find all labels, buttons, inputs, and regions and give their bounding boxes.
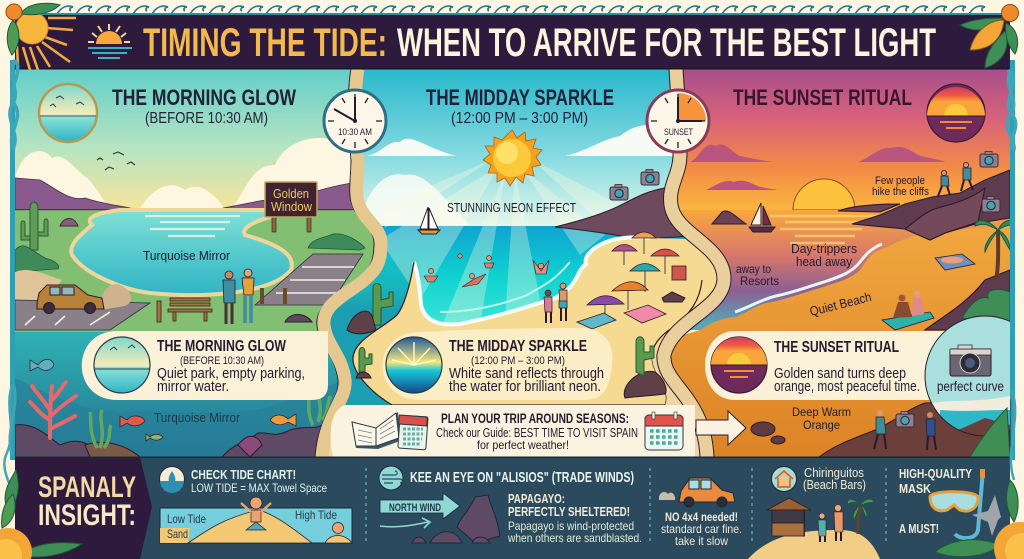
plan text line 2: for perfect weather!: [477, 438, 569, 452]
text: stunning neon effect: STUNNING NEON EFFECT: [447, 200, 576, 215]
cliffs: [838, 170, 1010, 330]
mask section: HIGH-QUALITY: [899, 466, 972, 481]
title gold: TIMING THE TIDE:: [143, 21, 387, 65]
clock: sunset: SUNSET: [664, 127, 693, 137]
text: resorts: Resorts: [740, 274, 779, 288]
heading: midday sparkle: (12:00 PM – 3:00 PM): [451, 110, 588, 127]
heading: morning glow: (BEFORE 10:30 AM): [145, 110, 268, 127]
stream rocks: [347, 311, 376, 378]
midday callout heading: THE MIDDAY SPARKLE: [449, 338, 587, 355]
cacti: [359, 284, 654, 376]
icon: orange car: [679, 478, 735, 507]
parked car: [37, 285, 104, 314]
tide chart section: [160, 466, 352, 543]
icon: snorkel mask: [930, 469, 1001, 538]
tropical leaves right: [970, 408, 1010, 457]
people at bar: [818, 504, 843, 542]
parking lot upper: [255, 254, 363, 305]
sunset callout body line 2: orange, most peaceful time.: [774, 378, 920, 395]
sailboat sunset: [749, 203, 775, 232]
rocks bottom right: [222, 425, 322, 457]
mask section: MASK: [899, 481, 932, 496]
callout: morning glow: [82, 331, 328, 400]
clock: 10:30 AM: 10:30 AM: [338, 127, 372, 137]
mask section: A MUST!: [899, 521, 939, 536]
lower cliff: [819, 400, 1010, 457]
beach umbrellas: [587, 232, 679, 322]
rope top left: [10, 60, 18, 150]
tide diagram: High Tide: [295, 508, 337, 522]
heading: sunset ritual: THE SUNSET RITUAL: [733, 85, 912, 110]
icon: large calendar: [645, 412, 683, 450]
morning callout time: (BEFORE 10:30 AM): [180, 355, 264, 367]
car section: [659, 478, 742, 548]
sand path divider right: [664, 69, 724, 457]
corner: bottom left flower: [0, 470, 82, 559]
papagayo text: PAPAGAYO:: [508, 491, 565, 506]
title banner: [15, 15, 1010, 70]
golden window sign: Golden: [273, 186, 309, 201]
text: hike the cliffs: hike the cliffs: [872, 186, 929, 198]
plan text line 1: Check our Guide: BEST TIME TO VISIT SPAIN: [436, 426, 638, 440]
icon: title sunrise: [88, 24, 132, 58]
divider 2: [649, 468, 651, 543]
label: turquoise mirror upper: Turquoise Mirror: [143, 248, 231, 263]
chiringuitos section: Chiringuitos: [804, 465, 864, 480]
corner: top right leaves: [960, 4, 1018, 68]
dust and sand left: [15, 270, 62, 305]
foliage lower right of beach: [962, 290, 1010, 325]
rope lower right: [1011, 390, 1015, 480]
sailboat midday: [418, 207, 440, 234]
rock: [412, 495, 500, 543]
sunset medallion: [711, 337, 767, 393]
palm: [848, 499, 874, 534]
sunset callout heading: THE SUNSET RITUAL: [774, 339, 899, 356]
arrow: north wind: [380, 493, 460, 519]
papagayo text: PERFECTLY SHELTERED!: [508, 504, 630, 519]
midday callout body line 2: the water for brilliant neon.: [449, 378, 601, 395]
small rock: [60, 218, 78, 226]
coral: [30, 382, 76, 438]
insight title block: SPANALY: [38, 471, 136, 504]
star shape: [972, 495, 1001, 536]
arrow: small wind: [380, 518, 430, 528]
callout: sunset ritual: [705, 331, 960, 400]
parking lot lower: [15, 300, 150, 330]
sand hill: [748, 530, 880, 559]
sunset sea: [660, 210, 1010, 330]
rocks bottom left: [15, 425, 140, 457]
camera icon: [950, 345, 991, 376]
text: head away: head away: [796, 254, 852, 269]
trade winds section: [379, 466, 642, 545]
papagayo text: Papagayo is wind-protected: [508, 519, 634, 533]
mask section: [899, 466, 1001, 538]
midday callout body line 1: White sand reflects through: [449, 365, 604, 382]
corner: bottom right flower: [935, 480, 1024, 559]
panel: the sunset ritual scene: [650, 69, 1018, 457]
seaweed: [90, 385, 331, 448]
palm tree: [974, 220, 1010, 280]
underwater section: [15, 332, 350, 457]
arrow: north wind: NORTH WIND: [389, 502, 441, 514]
golden window sign: Window: [271, 199, 313, 214]
tide diagram: Low Tide: [167, 512, 206, 526]
panel: the midday sparkle scene: [320, 69, 730, 460]
text: away to: away to: [736, 262, 771, 276]
cameras midday: [610, 170, 659, 200]
rope top right: [1007, 70, 1016, 150]
text: quiet beach: Quiet Beach: [808, 289, 873, 319]
heading: morning glow: [112, 85, 296, 127]
sad face: [332, 522, 344, 534]
panel: spanaly insight strip: [15, 456, 1010, 559]
trade winds heading: KEE AN EYE ON "ALISIOS" (TRADE WINDS): [410, 469, 634, 486]
fish: [30, 359, 296, 441]
beach people: [544, 283, 567, 323]
clouds midday: [360, 125, 680, 225]
insight title block: INSIGHT:: [38, 499, 136, 532]
midday beach sand: [354, 238, 716, 404]
tide diagram: [160, 497, 352, 543]
swimmers: [424, 254, 549, 287]
morning mountains: [15, 178, 138, 210]
callout: plan your trip: [331, 405, 695, 457]
couple: [223, 269, 254, 324]
heading: morning glow: THE MORNING GLOW: [112, 85, 296, 110]
bushes: [15, 234, 365, 272]
plan heading: PLAN YOUR TRIP AROUND SEASONS:: [441, 411, 629, 426]
parking posts and rock: [260, 288, 312, 322]
midday headland: [554, 188, 684, 238]
text: deep warm: Deep Warm: [792, 405, 851, 419]
car section: NO 4x4 needed!: [665, 510, 738, 524]
orange sand: [650, 225, 1010, 457]
midday medallion: [386, 337, 442, 393]
sunset callout body line 1: Golden sand turns deep: [774, 365, 906, 382]
plan background sand: [320, 405, 715, 457]
tide subheading: LOW TIDE = MAX Towel Space: [191, 481, 327, 495]
morning callout body line 1: Quiet park, empty parking,: [157, 365, 305, 382]
dark rocks on beach: [624, 292, 685, 398]
morning callout heading: THE MORNING GLOW: [157, 338, 287, 355]
divider 1: [365, 468, 367, 543]
callout: midday sparkle: [382, 328, 613, 400]
icon: tide drop: [160, 466, 184, 493]
cactus morning: [21, 202, 48, 250]
sun: [483, 130, 542, 186]
car section: standard car fine.: [661, 522, 742, 536]
hikers and camera on lower cliff: [874, 410, 936, 450]
corner: top left sun and fruit: [6, 3, 76, 70]
text: orange: Orange: [803, 418, 840, 432]
cameras on right cliffs: [980, 152, 1000, 212]
callout: perfect curve: [920, 310, 1024, 440]
heading: midday sparkle: THE MIDDAY SPARKLE: [426, 85, 614, 110]
turquoise lagoon: [71, 210, 292, 295]
tide heading: CHECK TIDE CHART!: [191, 467, 296, 482]
label: turquoise mirror lower: Turquoise Mirror: [154, 410, 241, 425]
heading: midday sparkle: [426, 85, 614, 127]
hikers on cliff: [938, 162, 973, 196]
small sea rock: [712, 211, 746, 224]
chiringuitos section: [748, 465, 880, 559]
icon: house: [772, 466, 796, 492]
morning land: [15, 210, 385, 335]
arrow: plan to sunset: [696, 411, 746, 445]
papagayo text: [507, 491, 642, 545]
chiringuitos section: (Beach Bars): [803, 477, 866, 492]
tide diagram: Sand: [167, 527, 188, 541]
beach bar hut: [767, 498, 811, 536]
car section: take it slow: [675, 534, 728, 548]
clock: sunset: [647, 90, 709, 152]
panel: the morning glow scene: [15, 69, 385, 457]
clock: 10:30 AM: [324, 90, 386, 152]
medallion: sunset: [927, 84, 985, 142]
rope lower left: [4, 385, 15, 500]
icon: wind: [379, 466, 403, 490]
lower cliff with hikers: [751, 422, 785, 444]
perfect curve label: perfect curve: [937, 378, 1004, 394]
sea midday: [339, 226, 686, 322]
towels and lounge: [577, 266, 686, 329]
clouds morning: [15, 138, 365, 209]
birds: [97, 152, 135, 170]
text: few people: Few people: [875, 175, 925, 187]
icon: open book: [352, 412, 400, 449]
divider 4: [885, 468, 887, 543]
dust puff: [659, 492, 675, 500]
divider 3: [751, 468, 753, 543]
dust cloud: [100, 284, 131, 310]
purple clouds: [690, 144, 946, 190]
text: day-trippers: Day-trippers: [791, 241, 857, 256]
papagayo text: when others are sandblasted.: [507, 531, 642, 545]
sand path divider left: [315, 69, 381, 457]
person sitting: [241, 497, 271, 530]
midday callout time: (12:00 PM – 3:00 PM): [471, 355, 565, 367]
towel couples: [882, 254, 975, 330]
setting sun: [793, 179, 855, 210]
morning callout body line 2: mirror water.: [157, 378, 229, 395]
golden window sign: [265, 182, 317, 232]
sun rays over sea: [380, 158, 620, 330]
morning medallion: [94, 337, 150, 393]
wooden bench: [157, 298, 212, 322]
medallion: morning: [39, 84, 97, 142]
icon: small calendar: [398, 415, 428, 450]
insight title block: [15, 457, 152, 559]
